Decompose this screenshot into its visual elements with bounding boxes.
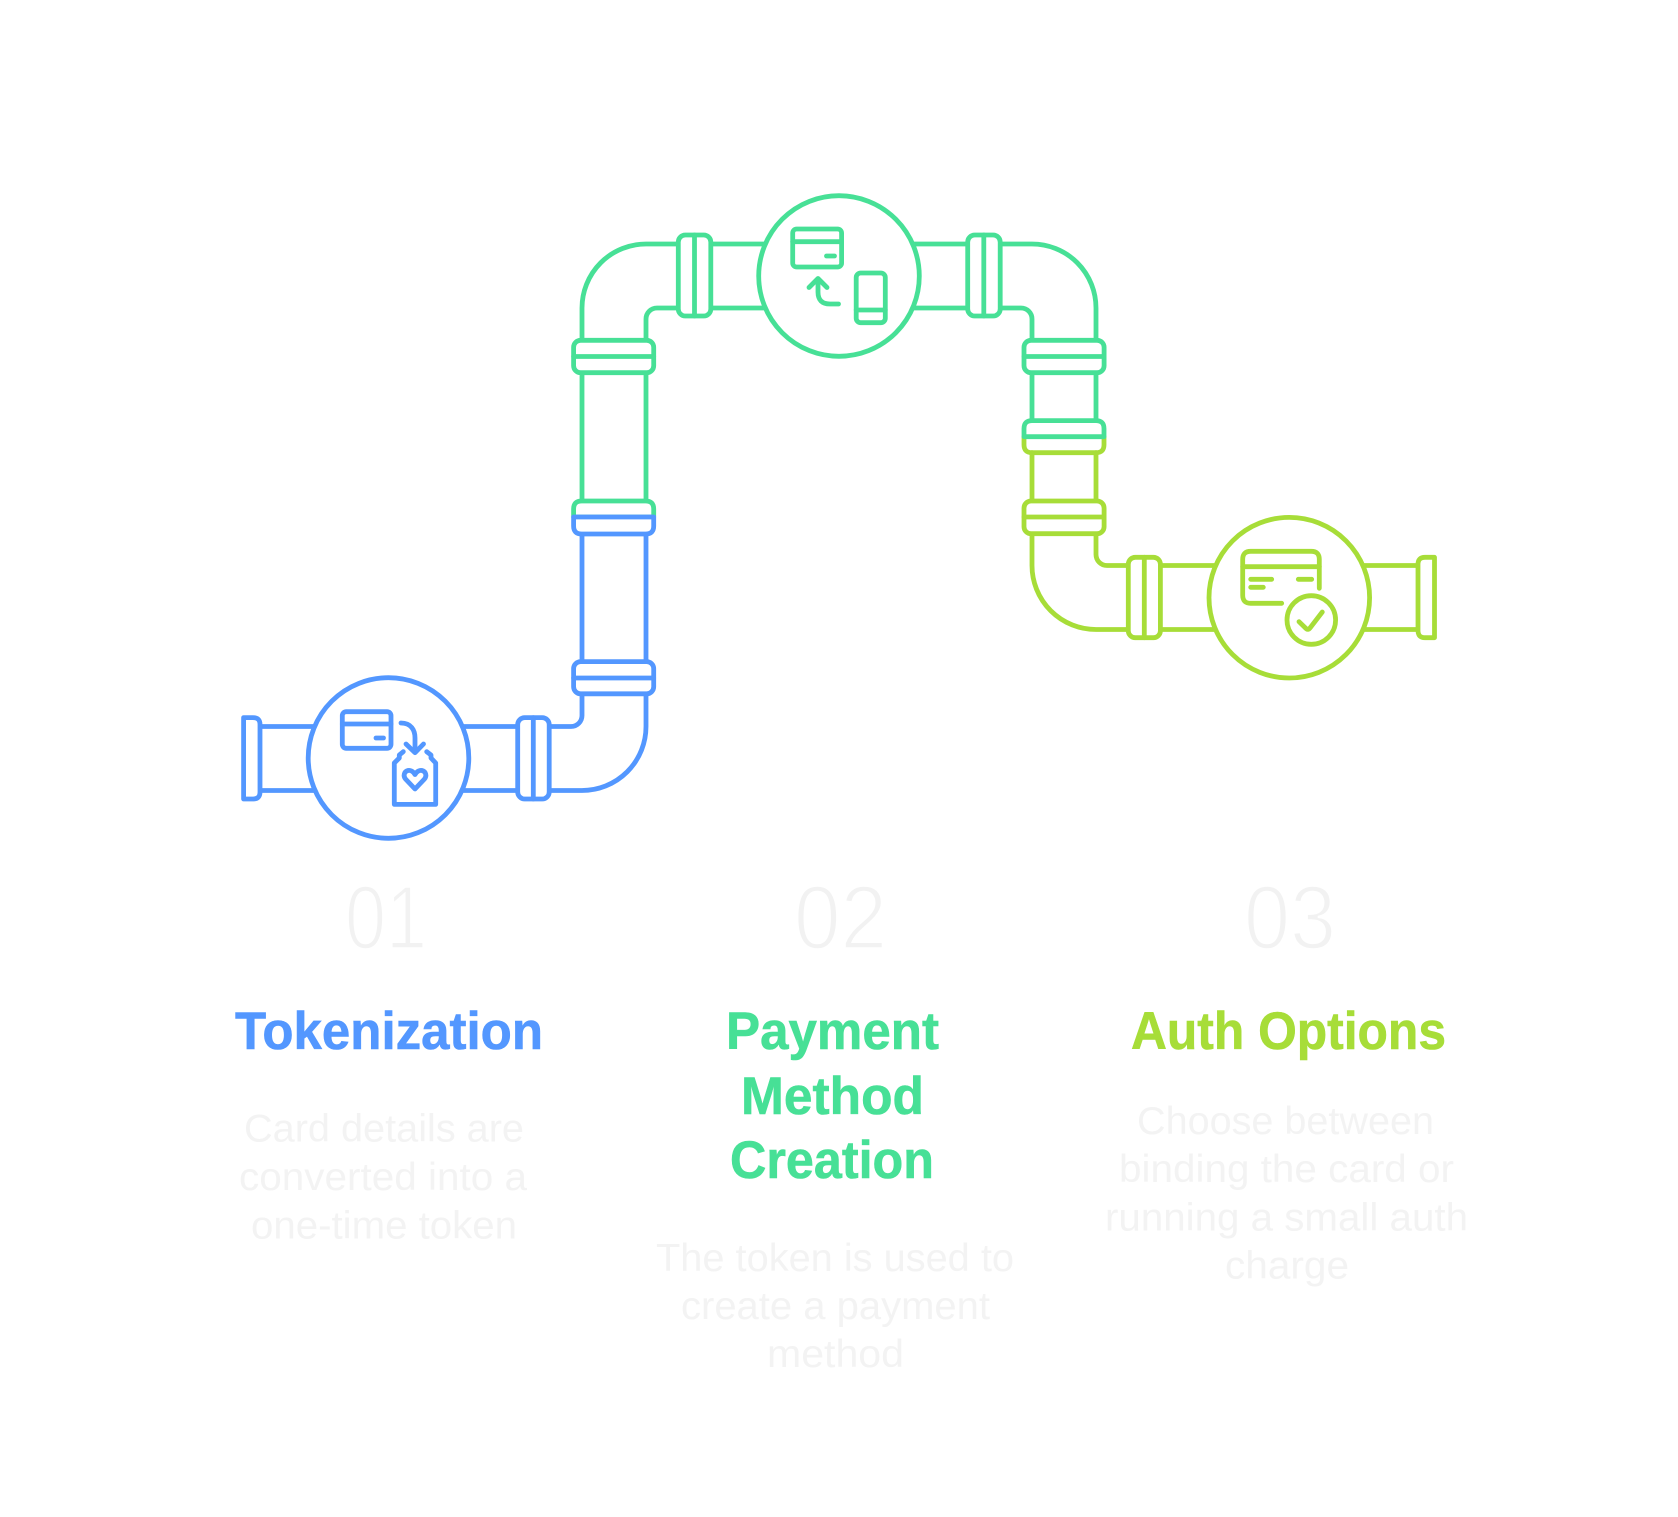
- pipeline: green middle section: [574, 235, 1104, 517]
- blue coupling: split lower half: [574, 517, 654, 534]
- description: Payment Method Creation: method: [767, 1333, 904, 1376]
- green pipe right elbow and vertical run: [1000, 244, 1096, 421]
- lime coupling: horizontal: [1128, 557, 1160, 638]
- lime coupling: split upper: [1024, 437, 1104, 453]
- green coupling: top left: [678, 235, 711, 316]
- blue coupling: vertical lower: [574, 662, 654, 694]
- description: Tokenization: Card details are: [244, 1108, 524, 1151]
- lime pipe elbow: [1032, 534, 1128, 630]
- icon: card into secure bag: [342, 712, 436, 804]
- description: Tokenization: [239, 1108, 527, 1248]
- description: Auth Options: running a small auth: [1105, 1196, 1468, 1240]
- lime end flange: [1418, 557, 1434, 638]
- description: Payment Method Creation: [656, 1237, 1014, 1376]
- hub circle: [1209, 517, 1370, 678]
- lime pipe vertical run: [1032, 453, 1096, 501]
- split coupling: green top over lime: [1024, 421, 1104, 437]
- pipeline: blue first section: [244, 517, 654, 799]
- green coupling: top right: [968, 235, 1000, 316]
- heading: Tokenization: Tokenization: [235, 1002, 543, 1061]
- description: Tokenization: one-time token: [251, 1204, 517, 1248]
- heading: Payment Method Creation: Creation: [730, 1131, 934, 1190]
- description: Auth Options: [1105, 1100, 1468, 1288]
- hub circle: [308, 678, 469, 838]
- lime coupling: lower: [1024, 501, 1104, 534]
- heading: Payment Method Creation: [726, 1002, 939, 1190]
- hub 1: tokenization: [308, 678, 469, 838]
- description: Payment Method Creation: create a payment: [681, 1285, 990, 1328]
- green coupling: upper right: [1024, 340, 1104, 373]
- step number 01: 01: [345, 868, 427, 968]
- description: Auth Options: charge: [1225, 1245, 1349, 1288]
- green pipe left vertical run and elbow: [582, 244, 678, 501]
- blue pipe elbow: [549, 694, 646, 790]
- hub 2: payment method creation: [759, 196, 919, 356]
- pipeline: lime last section: [1024, 437, 1434, 638]
- hub circle: [759, 196, 919, 356]
- green coupling: lower left: [574, 501, 654, 517]
- blue end flange: [244, 718, 260, 799]
- heading: Payment Method Creation: Method: [741, 1067, 924, 1126]
- heading: Auth Options: Auth Options: [1131, 1002, 1446, 1061]
- green pipe to hub connectors: [711, 244, 968, 308]
- icon: card and phone with arrow: [793, 229, 885, 323]
- blue pipe vertical run: [582, 534, 646, 662]
- description: Auth Options: binding the card or: [1119, 1148, 1454, 1191]
- description: Auth Options: Choose between: [1137, 1100, 1434, 1143]
- heading: Payment Method Creation: Payment: [726, 1002, 939, 1061]
- description: Tokenization: converted into a: [239, 1156, 527, 1199]
- green coupling: upper left: [574, 340, 654, 373]
- blue pipe to hub connectors: [260, 726, 518, 790]
- icon: card with check mark: [1243, 551, 1336, 644]
- step number 02: 02: [794, 868, 887, 968]
- blue coupling: horizontal: [518, 718, 549, 799]
- step number 03: 03: [1244, 868, 1336, 968]
- lime pipe to hub connectors: [1160, 566, 1418, 630]
- hub 3: auth options: [1209, 517, 1370, 678]
- description: Payment Method Creation: The token is used to: [656, 1237, 1014, 1280]
